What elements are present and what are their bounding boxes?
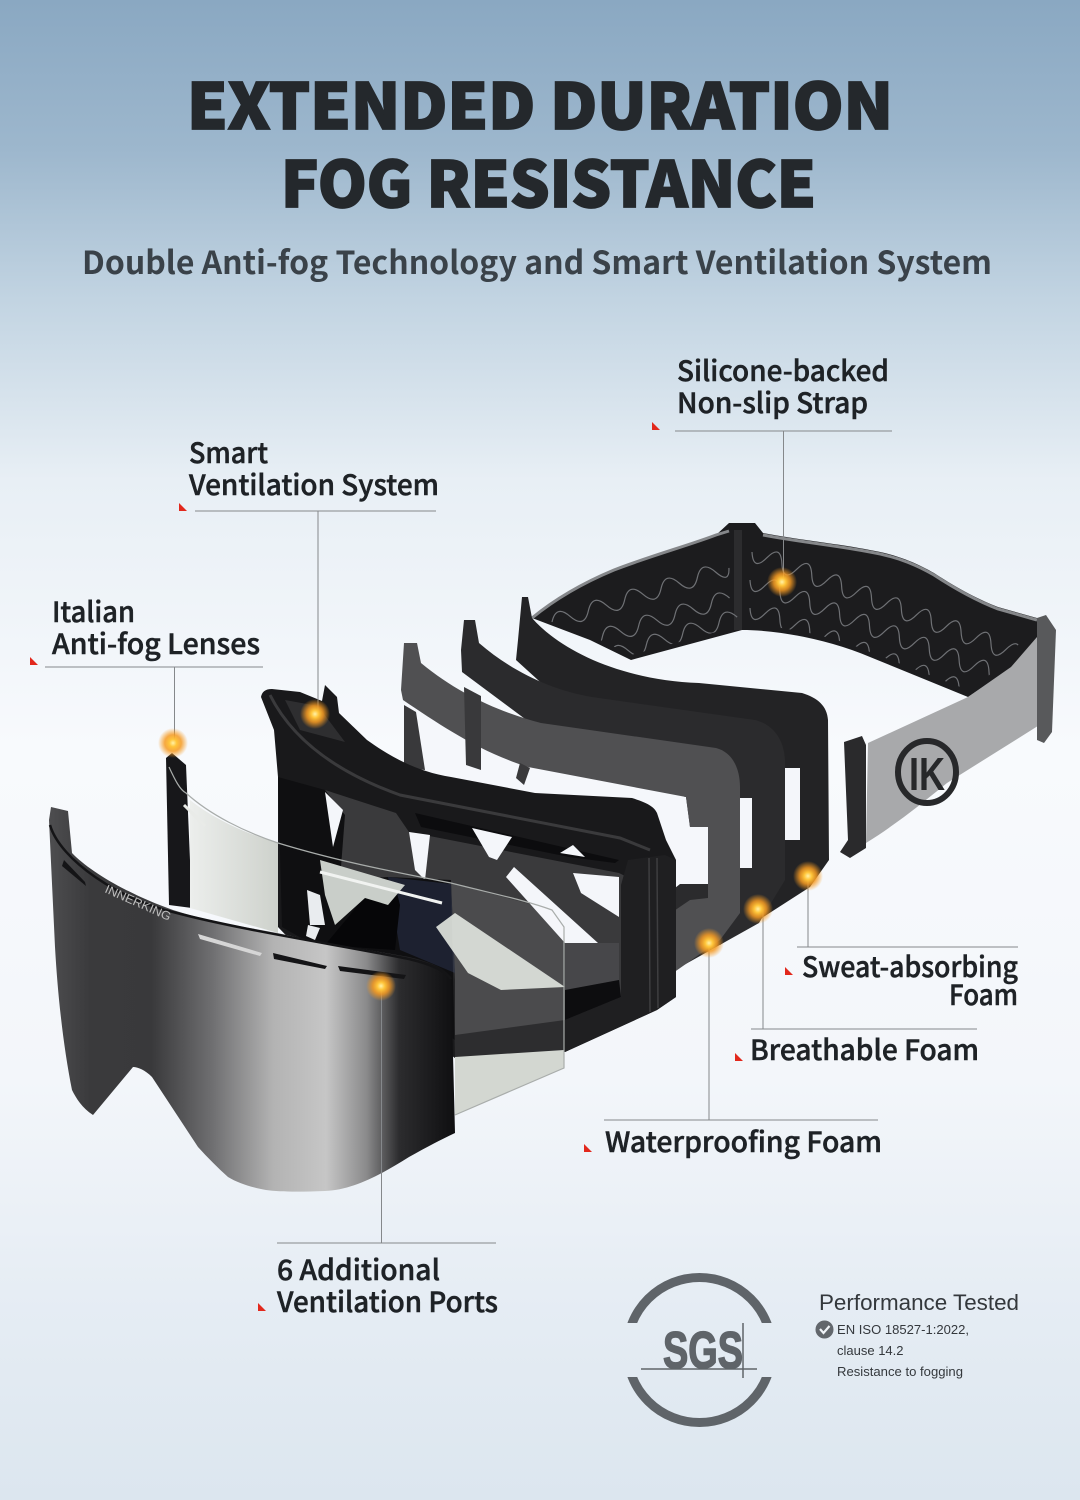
glow markers bbox=[158, 567, 823, 1001]
callout: italian anti-fog lenses: Anti-fog Lenses bbox=[52, 623, 260, 663]
performance tested text bbox=[816, 1290, 1019, 1379]
slot bbox=[785, 768, 800, 840]
performance tested text: Performance Tested bbox=[819, 1290, 1019, 1315]
pane bottom section bbox=[455, 1050, 564, 1115]
foam layer: breathable bbox=[461, 620, 785, 970]
lower strap inside opening bbox=[565, 943, 619, 990]
subtitle: Double Anti-fog Technology and Smart Ventilation System bbox=[82, 238, 992, 284]
title: FOG RESISTANCE bbox=[281, 135, 816, 226]
SGS badge bbox=[627, 1278, 772, 1422]
silicone wave lines bbox=[552, 551, 1018, 687]
callout: italian anti-fog lenses bbox=[30, 591, 260, 665]
frame lower right bbox=[565, 855, 676, 1052]
vent ports bbox=[62, 860, 406, 979]
performance tested text: EN ISO 18527-1:2022, bbox=[837, 1322, 969, 1337]
callout: smart ventilation system: Ventilation System bbox=[188, 464, 439, 504]
callout: breathable foam: Breathable Foam bbox=[750, 1029, 979, 1069]
callout: 6 additional ventilation ports bbox=[258, 1249, 498, 1321]
callout: silicone-backed non-slip strap bbox=[652, 350, 889, 430]
frame top vent bbox=[285, 700, 345, 742]
foam layer: sweat-absorbing bbox=[516, 597, 829, 945]
pane over white strap gap bbox=[436, 913, 565, 990]
title bbox=[187, 57, 893, 226]
title: EXTENDED DURATION bbox=[187, 57, 893, 148]
pane over pillar gap bbox=[320, 860, 405, 925]
pillar gaps bbox=[307, 890, 325, 925]
foam layer: waterproofing bbox=[401, 643, 740, 973]
performance tested text: Resistance to fogging bbox=[837, 1364, 963, 1379]
white gap behind foam bbox=[404, 700, 708, 900]
goggles exploded view bbox=[49, 523, 1056, 1192]
frame rim highlight bbox=[270, 695, 650, 850]
strap: inner silicone band bbox=[532, 523, 1040, 708]
callout: 6 additional ventilation ports: Ventilation Ports bbox=[276, 1281, 498, 1321]
icon: check badge bbox=[816, 1320, 834, 1338]
callout: smart ventilation system: Smart bbox=[189, 432, 268, 472]
callout: smart ventilation system bbox=[179, 432, 439, 511]
SGS badge: SGS bbox=[663, 1322, 743, 1380]
frame opening bbox=[325, 790, 627, 1035]
performance tested text: clause 14.2 bbox=[837, 1343, 904, 1358]
callout: italian anti-fog lenses: Italian bbox=[52, 591, 135, 631]
leader lines bbox=[45, 431, 1018, 1243]
clear anti-fog lens bbox=[166, 753, 565, 1115]
slot bbox=[740, 798, 752, 868]
dark knob bbox=[325, 885, 400, 950]
frame inner black corner bbox=[565, 980, 621, 1020]
callout: silicone-backed non-slip strap: Non-slip Strap bbox=[677, 382, 868, 422]
strap: grey outer band with IK logo bbox=[840, 615, 1056, 858]
upper slot bbox=[415, 813, 619, 863]
brand text: INNERKING bbox=[103, 882, 173, 924]
callout: sweat-absorbing foam: Foam bbox=[949, 974, 1018, 1014]
callout: 6 additional ventilation ports: 6 Additional bbox=[277, 1249, 440, 1289]
inner left pillars bbox=[278, 777, 455, 1040]
pane upper tint bbox=[451, 883, 564, 1060]
callout: waterproofing foam: Waterproofing Foam bbox=[605, 1121, 882, 1161]
strap: grey outer band with IK logo: IK bbox=[909, 748, 945, 800]
goggle frame bbox=[261, 685, 676, 1058]
white gaps through opening bbox=[409, 832, 619, 943]
callout: sweat-absorbing foam: Sweat-absorbing bbox=[802, 946, 1018, 986]
outer mirrored lens bbox=[49, 807, 455, 1192]
foam legs bbox=[404, 687, 530, 785]
callout: sweat-absorbing foam bbox=[785, 946, 1018, 1014]
callout: silicone-backed non-slip strap: Silicone-backed bbox=[677, 350, 889, 390]
